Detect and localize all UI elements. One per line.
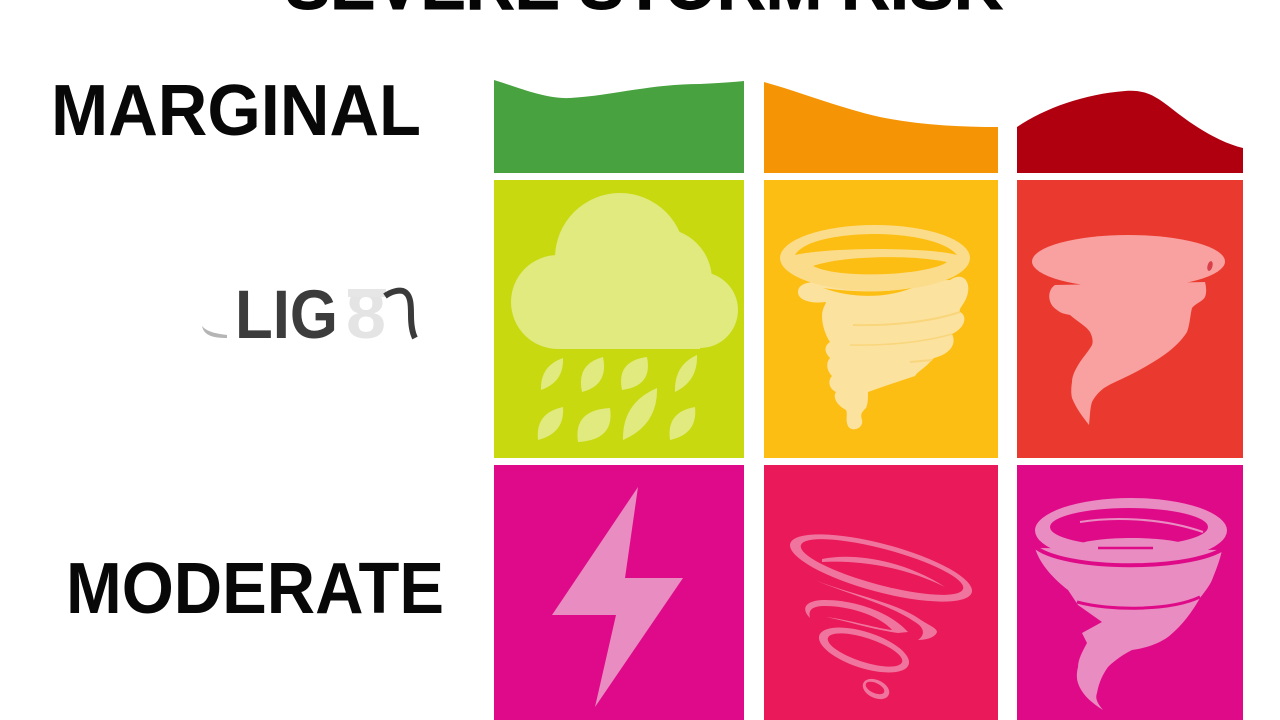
panel: magenta lightning tile (494, 465, 744, 720)
label: moderate: MODERATE (66, 549, 444, 629)
panel: red tornado tile (1017, 180, 1243, 458)
panel: orange header (764, 82, 998, 173)
icon: bowl tornado (1033, 498, 1228, 710)
icon: lightning bolt (552, 487, 683, 707)
panel: green header (494, 80, 744, 173)
icon: rain cloud (511, 193, 738, 442)
panel: crimson spiral tile (764, 465, 998, 720)
icon: rain drops (538, 355, 697, 442)
icon: funnel tornado (1032, 235, 1225, 425)
panel: yellow tornado tile (764, 180, 998, 458)
panel: lime cloud tile (494, 180, 744, 458)
panel: magenta funnel tile (1017, 465, 1243, 720)
label: slight, partly garbled (202, 276, 415, 353)
icon: wispy tornado (780, 225, 970, 429)
icon: spiral tornado (784, 520, 978, 703)
label: slight, partly garbled: 8 (346, 277, 386, 353)
panel: red header (1017, 91, 1243, 173)
label: slight, partly garbled: LIG (235, 276, 338, 353)
label: marginal: MARGINAL (51, 71, 421, 151)
